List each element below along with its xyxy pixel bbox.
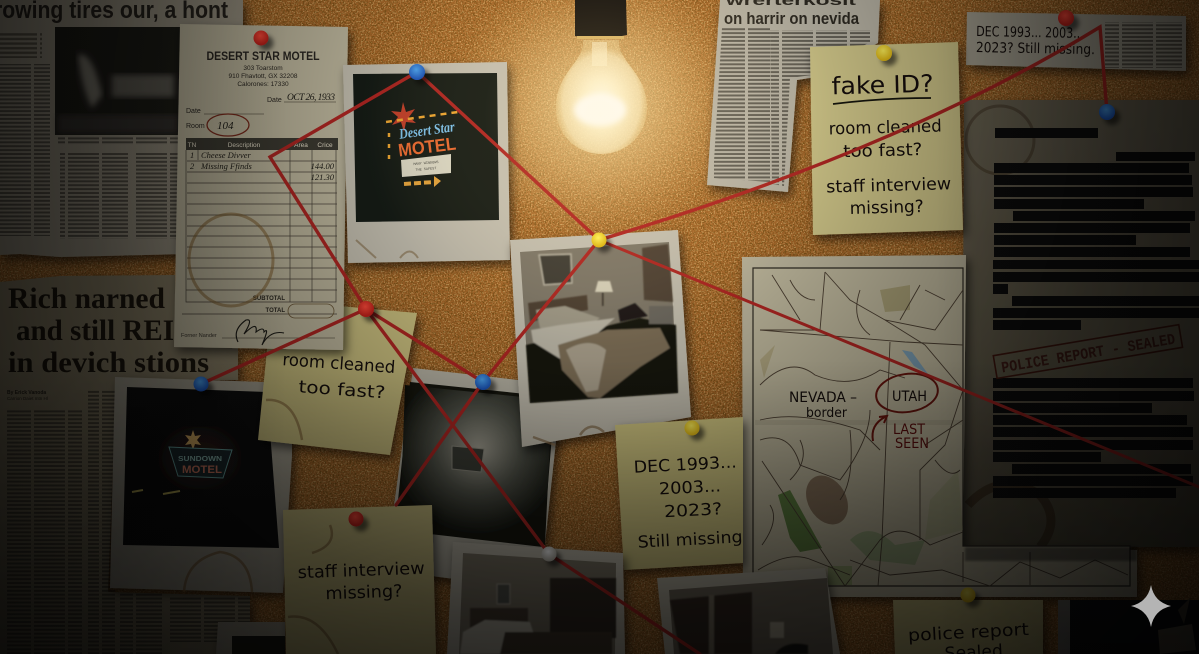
map roads: [758, 272, 1128, 586]
note: room cleaned: [258, 300, 417, 455]
map shade under report: [965, 547, 1137, 561]
receipt fields: OCT 26, 1933: [287, 93, 335, 103]
receipt signature: [181, 320, 335, 345]
receipt table: Missing Ffinds: [200, 161, 252, 171]
note text: too fast?: [298, 377, 386, 403]
newspaper clipping: lower left: [0, 275, 250, 654]
note text: 2023?: [664, 499, 723, 521]
note: fake ID: [810, 42, 963, 235]
newspaper byline: Carrion Daiet mtn Hl: [7, 396, 48, 401]
receipt fields: [186, 93, 336, 136]
neon motel sign: [386, 102, 458, 187]
receipt signature: Forner Nander: [181, 333, 217, 339]
bedroom photo details: [460, 578, 616, 654]
receipt table: Crice: [317, 142, 333, 149]
coffee ring on polaroid: [184, 552, 252, 592]
note text: DEC 1993...: [633, 452, 737, 477]
receipt heading: Calorones: 17330: [237, 81, 289, 88]
map labels: NEVADA –: [789, 390, 857, 406]
receipt table: SUBTOTAL: [253, 296, 285, 302]
receipt table: [182, 138, 338, 318]
coffee ring on receipt: [189, 214, 273, 306]
bottom right dark photo: [1058, 598, 1199, 654]
receipt table: TOTAL: [266, 308, 285, 314]
note: staff interview: [283, 505, 436, 654]
last seen circle and arrow: [872, 370, 940, 441]
receipt table: Cheese Divver: [201, 150, 251, 160]
receipt table: Area: [294, 142, 308, 149]
note text: missing?: [325, 582, 403, 604]
polaroid: bottom left partial: [216, 622, 285, 654]
sparkle watermark: [1131, 585, 1171, 627]
redaction bars: [993, 128, 1199, 498]
receipt fields: 104: [217, 120, 234, 132]
note text: [823, 69, 952, 220]
polaroid: motel bed: [510, 230, 691, 447]
polaroid stains: [533, 427, 604, 445]
neon motel sign: THE SAFEST: [415, 167, 437, 173]
night motel sign: [132, 430, 234, 494]
note text: [280, 350, 396, 404]
newspaper clipping: top left: [0, 0, 243, 257]
receipt fields: Date: [186, 108, 201, 115]
receipt table: Description: [228, 142, 261, 149]
newspaper clipping: top centre: [707, 0, 880, 192]
note text: missing?: [850, 197, 924, 219]
note text: staff interview: [826, 174, 952, 198]
map labels: [789, 389, 929, 452]
note: police report sealed: police report: [907, 620, 1030, 646]
map labels: LAST: [893, 422, 925, 438]
newspaper byline: By Erick Vanoda: [7, 390, 46, 396]
light bulb: [450, 0, 750, 240]
note text: [633, 452, 743, 552]
map labels: border: [806, 406, 848, 421]
receipt table: 2: [190, 161, 195, 171]
receipt heading: [206, 49, 320, 88]
bedroom photo details: [670, 592, 808, 654]
newspaper clipping: top centre: on harrir on nevida: [724, 9, 859, 28]
clipping handwriting: 2023? Still missing.: [976, 40, 1095, 58]
note text: room cleaned: [828, 117, 942, 139]
newspaper headline: in devich stions: [8, 346, 209, 379]
note text: too fast?: [843, 140, 923, 162]
map labels: SEEN: [895, 436, 929, 452]
receipt fields: Room: [186, 123, 205, 130]
polaroid: motel at night: [110, 377, 292, 593]
clipping: top right note: [966, 12, 1186, 71]
neon motel sign: Desert Star: [397, 119, 456, 143]
redacted police report: [962, 100, 1199, 547]
receipt heading: 303 Toarstom: [243, 65, 283, 72]
bedroom photo details: [526, 244, 678, 403]
note underline: [833, 98, 931, 104]
receipt heading: DESERT STAR MOTEL: [206, 49, 320, 63]
map: [742, 255, 1137, 597]
newspaper headline: Rich narned: [8, 282, 165, 315]
note: police report sealed: [893, 600, 1043, 654]
receipt heading: 910 Fhavtott, GX 32208: [228, 73, 298, 80]
polaroid: bedroom window: [657, 568, 840, 654]
police report stamp: POLICE REPORT - SEALED: [1000, 331, 1177, 377]
note text: 2003...: [658, 476, 721, 499]
receipt table: TN: [188, 142, 197, 149]
clipping handwriting: DEC 1993... 2003..: [976, 24, 1080, 42]
note text: fake ID?: [831, 70, 934, 100]
polaroid: Desert Star neon sign: [343, 62, 510, 263]
receipt table: 121.30: [311, 172, 335, 182]
polaroid stains: [356, 240, 418, 258]
receipt table: 144.00: [311, 161, 335, 171]
night motel sign: SUNDOWN: [178, 454, 222, 463]
note text: room cleaned: [282, 350, 396, 378]
neon motel sign: MANY WINDOWS: [413, 161, 439, 167]
receipt table: 1: [190, 150, 194, 160]
newspaper headline: and still REI: [16, 314, 174, 347]
map terrain: [755, 285, 963, 585]
red string network: [201, 27, 1199, 654]
neon motel sign: MOTEL: [397, 134, 457, 160]
note: DEC 1993: [615, 417, 743, 570]
note text: [297, 559, 426, 605]
note text: Still missing: [637, 527, 743, 552]
receipt fields: Date: [267, 97, 282, 104]
polaroid: bed daytime: [447, 542, 625, 654]
map labels: UTAH: [892, 389, 927, 405]
polaroid: empty dark room: [385, 368, 562, 590]
newspaper headline: [8, 282, 209, 379]
clipping handwriting: [976, 24, 1095, 58]
receipt: Desert Star Motel: [174, 24, 348, 350]
newspaper byline: [7, 390, 48, 401]
note text: staff interview: [297, 559, 425, 583]
push pins: [194, 10, 1115, 602]
night motel sign: MOTEL: [182, 464, 222, 476]
